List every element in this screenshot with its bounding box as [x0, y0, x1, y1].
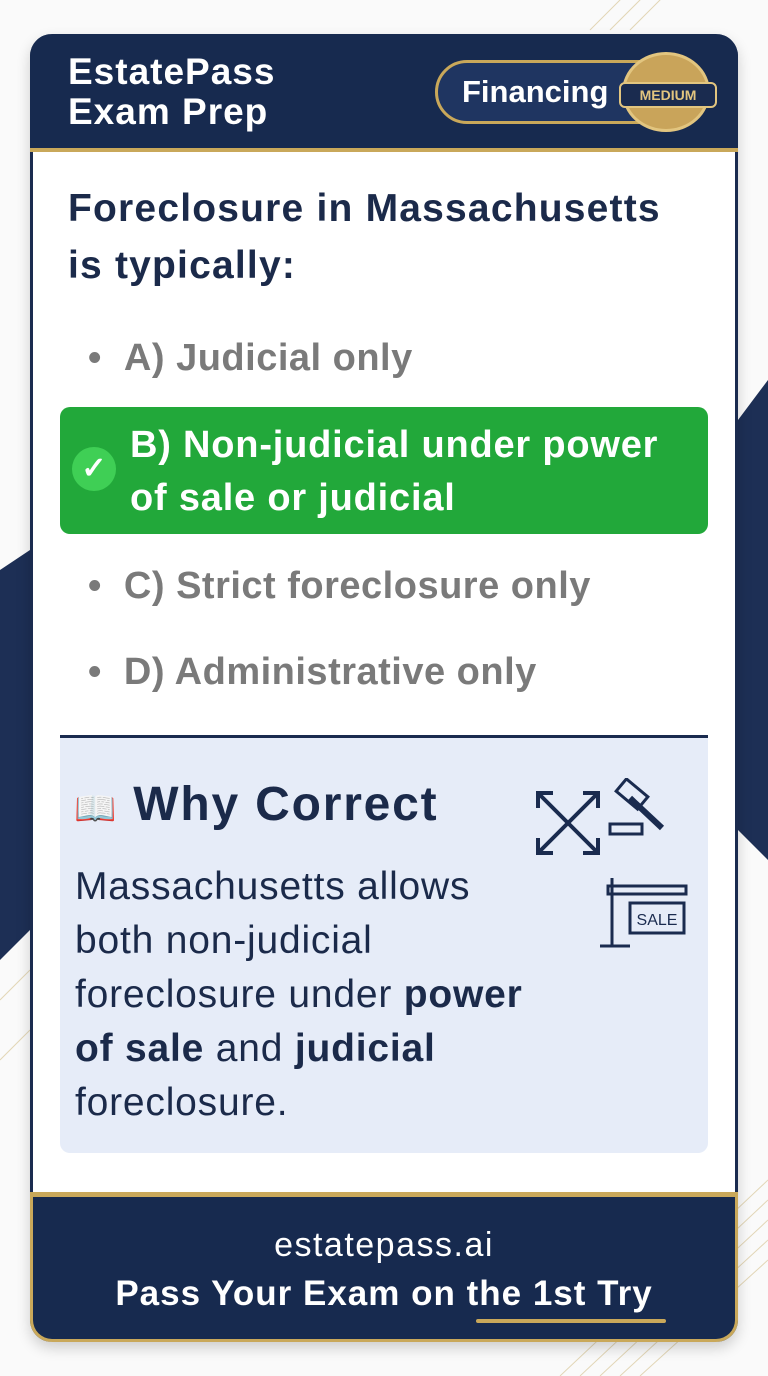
check icon: ✓	[81, 452, 107, 485]
tagline: Pass Your Exam on the 1st Try	[115, 1274, 653, 1313]
underline swoosh	[476, 1319, 666, 1323]
category pill: Financing	[462, 74, 608, 109]
brand title: EstatePass	[68, 51, 275, 92]
medium badge: MEDIUM	[640, 87, 696, 103]
body text	[75, 865, 523, 1124]
url: estatepass.ai	[274, 1226, 494, 1264]
option B correct: B) Non-judicial under power	[130, 424, 658, 466]
question: is typically:	[68, 244, 296, 287]
body text: both non-judicial	[75, 919, 373, 962]
check icon	[72, 447, 116, 491]
option B correct	[60, 407, 708, 534]
brand title	[68, 51, 275, 132]
option C: • C) Strict foreclosure only	[88, 565, 591, 607]
body text: foreclosure.	[75, 1081, 288, 1124]
question	[68, 187, 661, 287]
question: Foreclosure in Massachusetts	[68, 187, 661, 230]
body text: Massachusetts allows	[75, 865, 470, 908]
option D: • D) Administrative only	[88, 651, 537, 693]
option B correct: of sale or judicial	[130, 477, 456, 519]
option A: • A) Judicial only	[88, 337, 413, 379]
heading: 📖 Why Correct	[74, 778, 438, 831]
body text: foreclosure under power	[75, 973, 523, 1016]
footer	[30, 1192, 738, 1342]
header	[30, 34, 738, 152]
icon: arrows gavel sale sign	[536, 778, 688, 948]
explanation panel	[60, 735, 708, 1153]
medium badge	[622, 52, 710, 132]
category pill	[435, 60, 675, 124]
brand title: Exam Prep	[68, 91, 268, 132]
icon: arrows gavel sale sign: SALE	[637, 912, 677, 929]
body text: of sale and judicial	[75, 1027, 436, 1070]
